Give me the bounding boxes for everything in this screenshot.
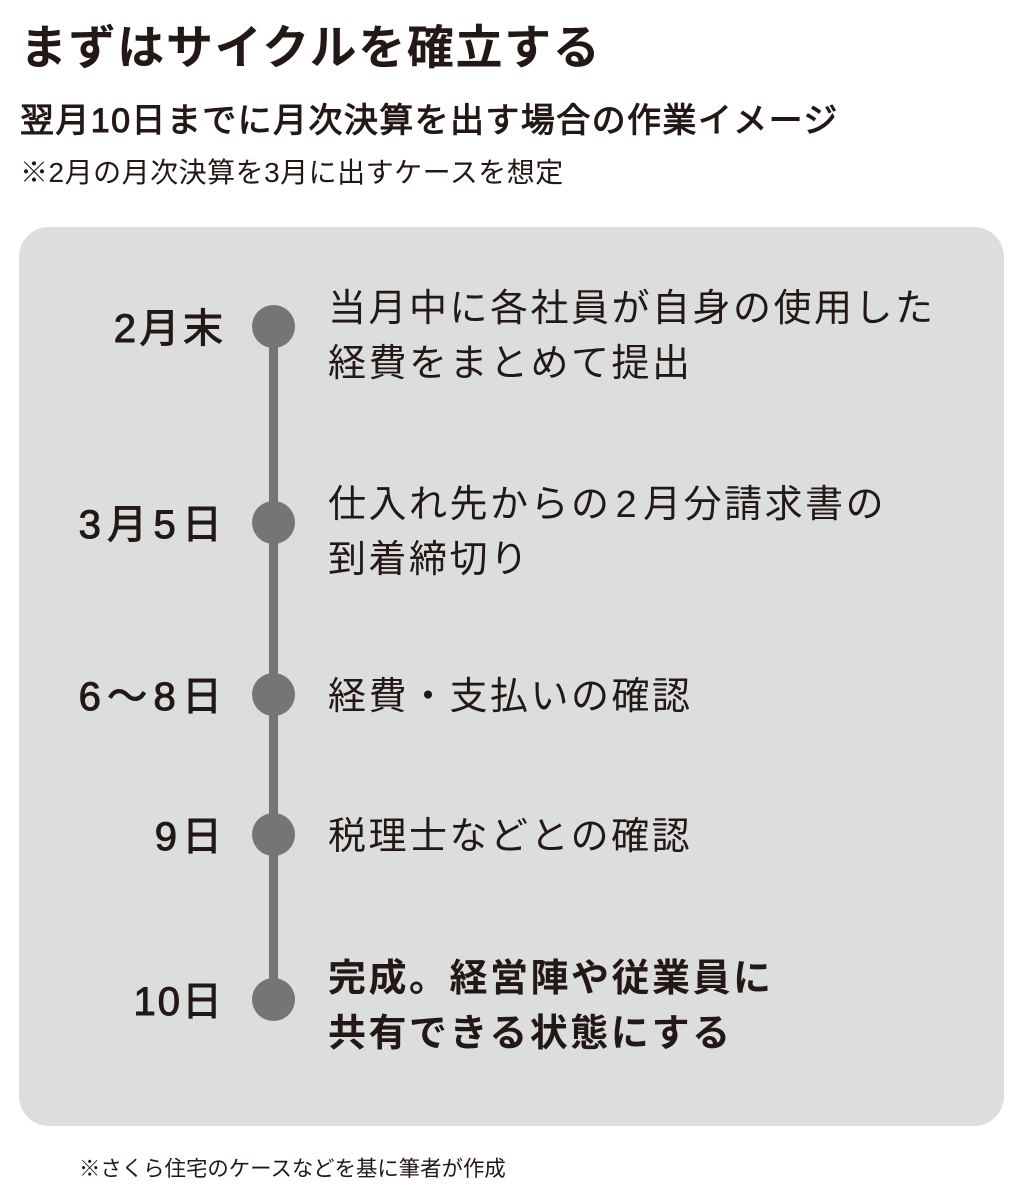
description: 当月中に各社員が自身の使用した [328,288,936,330]
subtitle: 翌月10日までに月次決算を出す場合の作業イメージ [20,102,839,140]
timeline line [269,326,278,1000]
description [328,288,936,385]
marker [252,813,295,856]
description: 共有できる状態にする [328,1013,733,1055]
description: 経費・支払いの確認 [328,676,693,718]
date label: 10日 [134,980,224,1024]
date label: 9日 [155,815,227,859]
description: 経費をまとめて提出 [328,343,693,385]
description: 仕入れ先からの2月分請求書の [328,484,886,526]
marker [252,673,295,716]
description: 到着締切り [328,539,531,581]
marker [252,978,295,1021]
note: ※2月の月次決算を3月に出すケースを想定 [20,156,564,188]
step: March 5 [79,484,886,581]
description [328,484,886,581]
marker [252,501,295,544]
marker [252,305,295,348]
source note: ※さくら住宅のケースなどを基に筆者が作成 [79,1156,506,1180]
title: まずはサイクルを確立する [20,20,601,74]
description: 完成。経営陣や従業員に [328,958,774,1000]
step: 6 to 8 [79,674,693,719]
date label: 6～8日 [79,675,228,719]
step: 9th [155,814,692,859]
description: 税理士などとの確認 [328,816,692,858]
date label: 3月5日 [79,503,228,547]
step: end of February [114,288,936,385]
panel: timeline [19,227,1004,1126]
step: 10th [134,958,774,1055]
date label: 2月末 [114,307,226,351]
description [328,958,774,1055]
